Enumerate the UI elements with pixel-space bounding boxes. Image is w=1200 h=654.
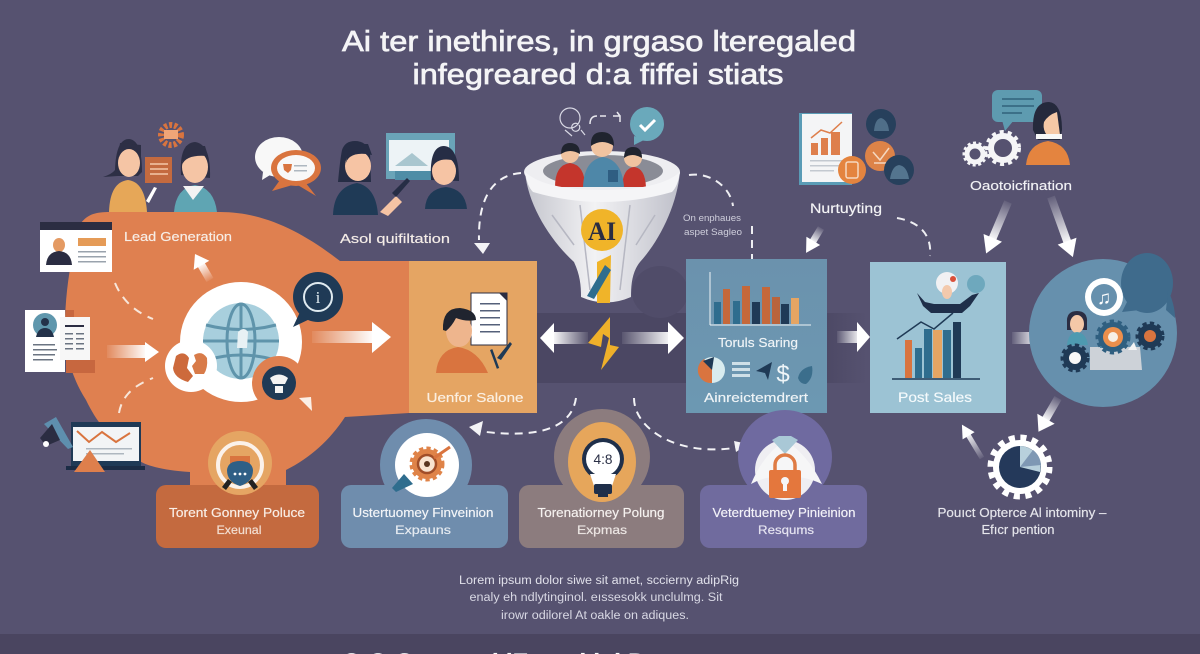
- icon: AI funnel with people: [524, 132, 680, 303]
- footer band: [0, 634, 1200, 654]
- icon: people in funnel: [555, 132, 646, 187]
- bar chart with trend: [892, 313, 980, 379]
- arrow: to qualification box: [312, 322, 391, 353]
- icon: padlock with wings: [751, 436, 822, 500]
- text: orange pill: [169, 506, 305, 537]
- icon: info bubble: i: [316, 288, 321, 307]
- icon: gear with pie: [991, 438, 1049, 496]
- heading: lead generation: Lead Generation: [124, 229, 232, 244]
- text: blue pill: Ustertuomey Finveinion: [352, 506, 494, 520]
- connecting shadow band: [537, 266, 867, 383]
- arrow: dashed vertical: [751, 226, 753, 260]
- text: purple pill: Veterdtuemey Pinieinion: [712, 506, 856, 520]
- icon: AI badge: [581, 209, 623, 251]
- icon: light bulb: [568, 422, 636, 502]
- arrow: dashed to purple pill: [634, 398, 748, 452]
- text: outcome caption: Efıcr pention: [982, 522, 1054, 537]
- label: small caption: [683, 213, 742, 238]
- label: post sales: Post Sales: [898, 389, 972, 405]
- text: orange pill: Exeunal: [216, 523, 262, 537]
- text: tan pill: Torenatiorney Polung: [538, 506, 665, 520]
- icon: info bubble: [293, 272, 343, 327]
- arrow: gear to post sales: [956, 421, 988, 462]
- text: orange pill: Torent Gonney Poluce: [169, 506, 305, 520]
- arrow: double arrow right: [622, 322, 684, 354]
- text: body paragraph: Lorem ipsum dolor siwe sit amet, sccierny adipRig: [459, 575, 739, 587]
- icon: two people with document: [103, 125, 217, 212]
- panel: orange pill: [156, 431, 319, 548]
- title: Ai ter inethires, in grgaso lteregaled: [342, 26, 856, 58]
- icon: presenter: [917, 272, 985, 313]
- icon row: pie, list, cursor, dollar, leaf: $: [776, 361, 790, 388]
- text: body paragraph: irowr odilorel At oakle on adiques.: [501, 610, 689, 622]
- icon: target gear: [392, 433, 459, 497]
- arrow: up to heading: [187, 250, 218, 284]
- text: blue pill: Expauns: [395, 523, 451, 537]
- label: small caption: On enphaues: [683, 213, 741, 224]
- label: enrichment: Ainreictemdrert: [704, 390, 808, 405]
- panel: blue tools box: [686, 259, 827, 413]
- icon: lightning bolt: [588, 317, 619, 370]
- arrow: optimisation to post sales: [977, 198, 1017, 257]
- icon: resume card: [25, 310, 95, 373]
- text: outcome caption: [938, 505, 1107, 537]
- icon: browser card: [40, 222, 112, 272]
- text: body paragraph: [459, 575, 739, 622]
- panel: purple pill: [700, 410, 867, 548]
- facets of funnel: [552, 205, 655, 290]
- arrow: to post sales: [837, 322, 870, 352]
- arrow: from resume: [107, 342, 159, 362]
- title: infegreared d:a fiffei stiats: [412, 59, 784, 91]
- panel: outcomes circle: [1029, 253, 1177, 407]
- icon: idea, arrows and check bubble: [560, 107, 664, 145]
- panel: blue pill: [341, 419, 508, 548]
- icon: speech bubbles: [255, 137, 321, 196]
- arrow: dashed bottom: [119, 378, 153, 413]
- panel: post sales box: [870, 262, 1006, 413]
- icon: light bulb: 4:8: [594, 451, 613, 467]
- icon: robot badge: [208, 431, 272, 495]
- label: small caption: aspet Sagleo: [684, 227, 742, 238]
- text: body paragraph: enaly eh ndlytinginol. eıssesokk unclulmg. Sit: [470, 592, 723, 604]
- arrow: nurturing to box: [799, 224, 828, 257]
- arrow: dashed from post sales: [897, 218, 930, 256]
- heading: qualification: Asol quifiltation: [340, 231, 450, 246]
- label: tools: Toruls Saring: [718, 335, 798, 350]
- icon: support badge: [252, 356, 306, 410]
- icon: person with bubble and gears: [964, 90, 1070, 165]
- icon: laptop with chart and megaphone: [40, 417, 145, 472]
- arrow: small white pointer: [299, 397, 312, 411]
- icon: music ring: ♫: [1097, 288, 1111, 309]
- arrow: dashed from funnel: [689, 175, 733, 206]
- arrow: dashed to blue pill: [469, 398, 576, 436]
- icon: report with circles: [799, 109, 914, 185]
- icon: gears: [1063, 322, 1162, 370]
- rim of funnel: [525, 172, 680, 202]
- title: [342, 26, 856, 91]
- icon: AI badge: AI: [588, 217, 616, 246]
- label: sales box: Uenfor Salone: [426, 390, 524, 405]
- bar chart: [710, 272, 811, 325]
- icon: music ring: [1085, 278, 1123, 316]
- text: purple pill: Resqums: [758, 523, 814, 537]
- text: tan pill: Expmas: [577, 523, 627, 537]
- arrow: double arrow left: [540, 323, 588, 353]
- icon: dark bubble: [1121, 253, 1175, 318]
- heading: optimisation: Oaotoicfination: [970, 178, 1072, 193]
- icon: broken heart circle: [165, 340, 217, 392]
- text: outcome caption: Pouıct Opterce Al intominy –: [938, 505, 1107, 520]
- panel: lead generation blob: [65, 212, 409, 490]
- heading: nurturing: Nurtuyting: [810, 201, 882, 216]
- arrow: dashed to qualification box: [474, 173, 521, 254]
- arrow: circle to gear: [1030, 393, 1067, 437]
- panel: sales box: [409, 261, 537, 413]
- text: tan pill: [538, 506, 665, 537]
- arrow: optimisation to circle: [1042, 194, 1082, 261]
- icon: yellow stripe with pen: [587, 255, 611, 303]
- icon: person with document: [436, 293, 512, 373]
- arrow: dashed top: [115, 283, 153, 319]
- panel: tan pill: [519, 409, 684, 548]
- icon: globe in white circle: [180, 282, 302, 402]
- icon: two people at presentation screen: [333, 133, 467, 216]
- text: purple pill: [712, 506, 856, 537]
- text: blue pill: [352, 506, 494, 537]
- icon row: pie, list, cursor, dollar, leaf: [698, 357, 812, 388]
- icon: person and laptop: [1067, 311, 1142, 370]
- arrow: to outcomes circle: [1012, 322, 1048, 354]
